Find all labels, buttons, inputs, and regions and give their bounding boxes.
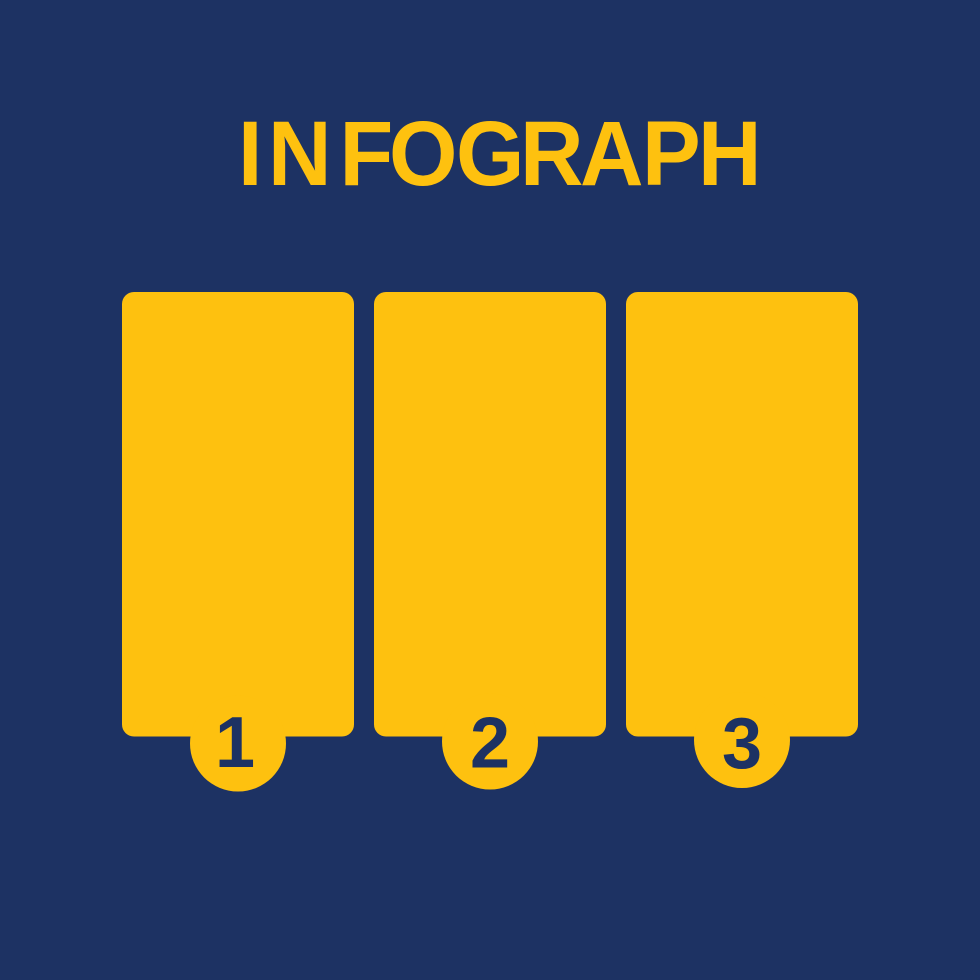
number 3: 3 <box>722 704 762 784</box>
panel 3 <box>626 292 858 788</box>
number 1: 1 <box>215 703 255 783</box>
panel 2 <box>374 292 606 790</box>
panel 1 <box>122 292 354 792</box>
number 2: 2 <box>470 704 510 784</box>
title: INFOGRAPH <box>238 103 762 205</box>
